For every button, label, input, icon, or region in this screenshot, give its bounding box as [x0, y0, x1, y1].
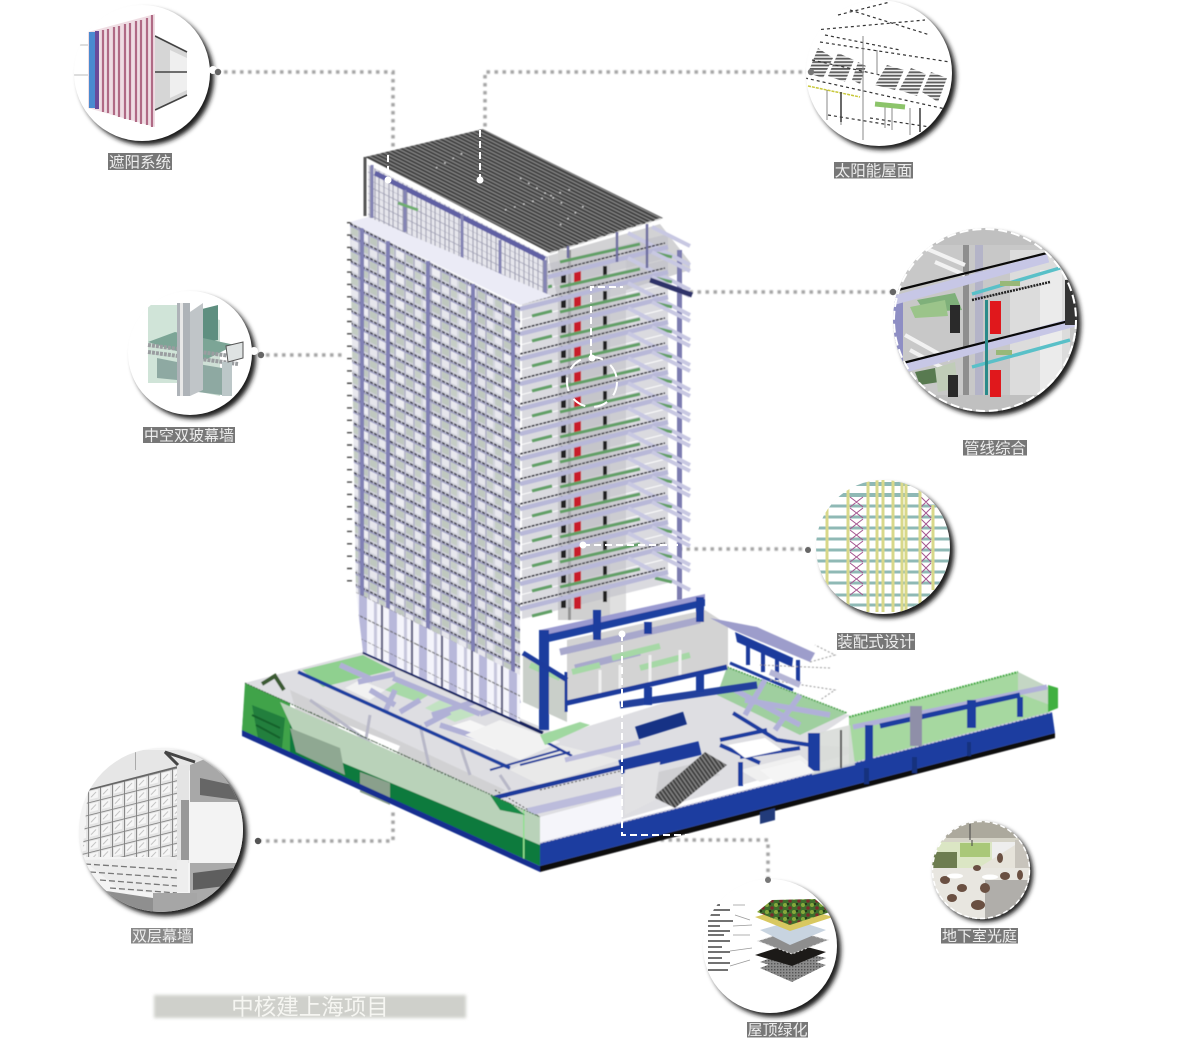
left base strip: [242, 730, 540, 872]
title banner: 中核建上海项目: [231, 995, 389, 1020]
callout: sunshade system: [70, 5, 221, 145]
connector lines: [216, 72, 893, 880]
label: basement light court: 地下室光庭: [942, 928, 1017, 945]
west facade columns: [362, 228, 513, 672]
callout: MEP integration: [890, 228, 1081, 416]
lavender top deck: [540, 594, 705, 640]
callout: insulated glass curtain wall: [128, 291, 264, 419]
legend bars: [708, 905, 733, 970]
solar louvre roof: [365, 129, 663, 268]
west facade: [350, 222, 520, 675]
green slab strips: [530, 646, 690, 678]
lower-left glass volume: [523, 655, 567, 722]
top beam: [540, 599, 705, 644]
podium interior floor: [245, 652, 870, 843]
staircase: [653, 752, 727, 808]
front blue wall: [540, 712, 1055, 872]
front left green wall: [242, 676, 540, 866]
roof garden plane: [302, 655, 520, 750]
label: MEP integration: 管线综合: [964, 440, 1026, 458]
right column: [677, 250, 682, 600]
roof speckle: [436, 150, 585, 225]
wing back wall: [849, 672, 1058, 765]
green void: [540, 722, 590, 745]
translucent block volume: [567, 610, 728, 703]
callout: basement light court: [932, 820, 1033, 922]
vertical glass panes: [600, 650, 680, 695]
roof parapet: [350, 217, 552, 305]
tower: [350, 129, 692, 722]
callout: solar roof: [805, 0, 956, 150]
floor ticks: [347, 222, 352, 592]
label: solar roof: 太阳能屋面: [835, 162, 912, 180]
main column: [539, 630, 549, 730]
penthouse face: [368, 165, 548, 295]
interior glass rooms: [290, 690, 812, 843]
podium blue beams: [298, 652, 650, 812]
wing structure and columns: [808, 687, 1047, 784]
glass block lower: [625, 762, 660, 815]
ghost slabs: [710, 618, 835, 700]
central beams and terrace: [717, 667, 847, 786]
title banner: [154, 995, 466, 1020]
lobby facade: [356, 592, 520, 722]
callout: double-skin facade: [79, 748, 261, 916]
callout: green roof: [703, 877, 841, 1017]
callout: prefabricated design: [805, 476, 954, 618]
tower core: [548, 224, 690, 620]
floor slabs on east face: [520, 227, 690, 619]
label: double-skin facade: 双层幕墙: [132, 928, 192, 945]
label: insulated glass curtain wall: 中空双玻幕墙: [144, 428, 234, 444]
mid beams and columns: [523, 597, 757, 767]
podium: base and walls: [242, 652, 1058, 872]
leader dots: [384, 176, 626, 638]
label: green roof: 屋顶绿化: [747, 1022, 808, 1039]
front lower block: [523, 594, 835, 815]
penthouse detail: [365, 157, 545, 298]
dark beam: [650, 280, 692, 295]
label: prefabricated design: 装配式设计: [837, 633, 915, 651]
label: sunshade system: 遮阳系统: [109, 154, 171, 172]
lavender deck strips: [560, 620, 700, 668]
white leader lines: [388, 130, 690, 835]
